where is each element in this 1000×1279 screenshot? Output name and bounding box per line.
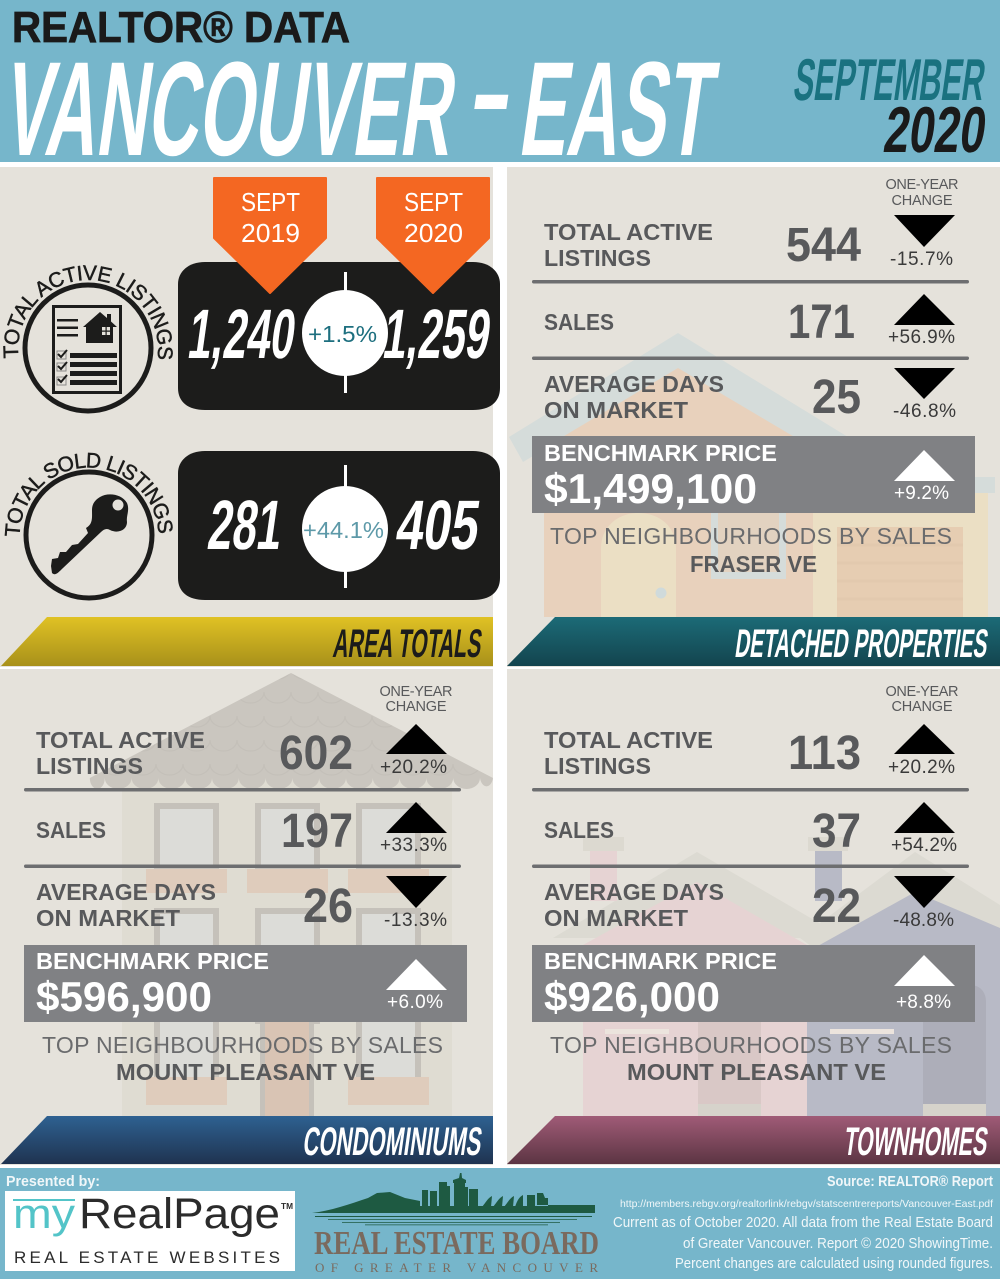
active listings values: 1,259 xyxy=(379,294,496,373)
curved heading: total active listings: TOTAL ACTIVE LISTINGS xyxy=(3,265,173,360)
benchmark price box: $1,499,100 xyxy=(544,465,757,512)
stat: average days on market: -46.8% xyxy=(893,401,956,422)
benchmark price box: BENCHMARK PRICE xyxy=(544,948,777,974)
benchmark price box xyxy=(532,436,975,513)
stat: sales: SALES xyxy=(36,817,106,843)
top neighbourhood: MOUNT PLEASANT VE xyxy=(627,1059,886,1085)
title: - xyxy=(462,25,523,159)
stat: total active listings xyxy=(36,724,447,780)
active listings black box xyxy=(178,262,500,410)
stat: total active listings: +20.2% xyxy=(888,757,955,778)
stat: total active listings: -15.7% xyxy=(890,249,953,270)
logo: real estate board of greater vancouver: REAL ESTATE BOARD xyxy=(314,1225,599,1262)
stat: sales: 197 xyxy=(281,805,353,858)
stat: total active listings xyxy=(544,177,958,272)
stat: average days on market: -48.8% xyxy=(893,910,954,931)
title: VANCOUVER xyxy=(0,34,466,184)
illustration: detached house xyxy=(509,333,995,617)
banner: condominiums xyxy=(1,1116,493,1164)
footer xyxy=(0,1168,1000,1279)
one-year change heading xyxy=(380,684,452,715)
one-year change heading: ONE-YEAR xyxy=(380,684,452,700)
stat: sales: 171 xyxy=(788,296,855,349)
sold listings values xyxy=(204,485,485,564)
panel: area totals xyxy=(0,167,500,667)
stat: total active listings: LISTINGS xyxy=(36,753,143,779)
active listings values xyxy=(184,294,496,373)
header banner xyxy=(0,0,1000,184)
sold change dial xyxy=(302,465,388,588)
stat: total active listings: 602 xyxy=(279,727,353,780)
top neighbourhood: TOP NEIGHBOURHOODS BY SALES xyxy=(550,523,952,549)
benchmark price box xyxy=(24,945,467,1022)
logo: myRealPage: my xyxy=(13,1190,75,1237)
top neighbourhood xyxy=(550,523,952,577)
banner: condominiums: CONDOMINIUMS xyxy=(301,1119,485,1164)
stat: average days on market xyxy=(36,876,447,933)
presented by label: Presented by: xyxy=(6,1173,100,1190)
stat: average days on market: ON MARKET xyxy=(36,905,180,931)
stat: sales xyxy=(544,802,957,858)
ribbon: sept 2020: 2020 xyxy=(404,218,463,248)
stat: total active listings: LISTINGS xyxy=(544,753,651,779)
stat: total active listings: TOTAL ACTIVE xyxy=(36,727,205,753)
top neighbourhood: TOP NEIGHBOURHOODS BY SALES xyxy=(550,1032,952,1058)
stat: average days on market: AVERAGE DAYS xyxy=(544,879,724,905)
stat: total active listings xyxy=(544,724,955,780)
icon: key xyxy=(26,472,152,598)
stat: total active listings: 113 xyxy=(788,727,861,780)
panel: detached properties xyxy=(507,167,1000,667)
stat: average days on market: 22 xyxy=(812,880,861,933)
banner: townhomes xyxy=(507,1116,1000,1164)
benchmark price box: +6.0% xyxy=(387,992,443,1013)
source notes xyxy=(613,1174,993,1272)
stat: sales: SALES xyxy=(544,817,614,843)
illustration: condo building xyxy=(90,673,493,1116)
stat: sales: +33.3% xyxy=(380,835,447,856)
stat: average days on market: AVERAGE DAYS xyxy=(544,371,724,397)
sold listings values: 281 xyxy=(204,485,288,564)
stat: total active listings: ONE-YEAR xyxy=(886,177,958,193)
stat: sales: 37 xyxy=(812,805,861,858)
stat: total active listings: LISTINGS xyxy=(544,245,651,271)
one-year change heading: CHANGE xyxy=(386,699,447,715)
banner: detached properties xyxy=(507,617,1000,666)
top neighbourhood xyxy=(550,1032,952,1085)
illustration: townhouses xyxy=(553,837,1000,1116)
stat: sales: +54.2% xyxy=(891,835,957,856)
stat: average days on market: ON MARKET xyxy=(544,905,688,931)
ribbon: sept 2019 xyxy=(214,178,326,293)
stat: average days on market: 26 xyxy=(303,880,353,933)
panel: townhomes xyxy=(507,669,1000,1165)
ribbon: sept 2019: SEPT xyxy=(241,187,300,217)
top neighbourhood: FRASER VE xyxy=(690,551,817,577)
active change dial: +1.5% xyxy=(308,321,377,347)
top neighbourhood xyxy=(42,1032,443,1085)
sold listings values: 405 xyxy=(392,485,485,564)
stat: total active listings: TOTAL ACTIVE xyxy=(544,727,713,753)
stat: average days on market: 25 xyxy=(812,371,861,424)
logo: real estate board of greater vancouver xyxy=(312,1173,599,1275)
sold listings black box xyxy=(178,451,500,600)
sold change dial: +44.1% xyxy=(303,517,384,543)
stat: sales: SALES xyxy=(544,309,614,335)
stat: average days on market: ON MARKET xyxy=(544,397,688,423)
ribbon: sept 2019: 2019 xyxy=(241,218,300,248)
panel: condominiums xyxy=(0,669,493,1165)
ribbon: sept 2020 xyxy=(377,178,489,293)
benchmark price box: BENCHMARK PRICE xyxy=(36,948,269,974)
benchmark price box: +9.2% xyxy=(894,483,949,504)
one-year change heading: CHANGE xyxy=(892,699,953,715)
header kicker: REALTOR® DATA xyxy=(12,3,350,52)
stat: average days on market: -13.3% xyxy=(384,910,447,931)
active listings values: 1,240 xyxy=(184,294,301,373)
logo: myRealPage: RealPage xyxy=(79,1190,280,1238)
stat: total active listings: +20.2% xyxy=(380,757,447,778)
top neighbourhood: MOUNT PLEASANT VE xyxy=(116,1059,375,1085)
one-year change heading xyxy=(886,684,958,715)
stat: total active listings: 544 xyxy=(786,219,861,272)
logo: myRealPage: REAL ESTATE WEBSITES xyxy=(14,1248,280,1267)
top neighbourhood: TOP NEIGHBOURHOODS BY SALES xyxy=(42,1032,443,1058)
stat: sales xyxy=(544,294,955,349)
ribbon: sept 2020: SEPT xyxy=(404,187,463,217)
benchmark price box: +8.8% xyxy=(896,992,951,1013)
stat: average days on market xyxy=(544,876,955,933)
benchmark price box: BENCHMARK PRICE xyxy=(544,440,777,466)
benchmark price box: $926,000 xyxy=(544,973,720,1020)
stat: average days on market: AVERAGE DAYS xyxy=(36,879,216,905)
active change dial xyxy=(302,272,388,393)
stat: total active listings: TOTAL ACTIVE xyxy=(544,219,713,245)
stat: total active listings: CHANGE xyxy=(892,193,953,209)
logo: myRealPage xyxy=(5,1190,295,1271)
curved heading: total sold listings: TOTAL SOLD LISTINGS xyxy=(4,452,173,536)
stat: average days on market xyxy=(544,368,956,424)
logo: myRealPage: TM xyxy=(281,1202,293,1211)
icon: listing document xyxy=(25,285,151,411)
benchmark price box xyxy=(532,945,975,1022)
banner: area totals: AREA TOTALS xyxy=(331,621,485,666)
logo: real estate board of greater vancouver: OF GREATER VANCOUVER xyxy=(315,1260,598,1275)
one-year change heading: ONE-YEAR xyxy=(886,684,958,700)
title: EAST xyxy=(513,34,725,184)
stat: sales: +56.9% xyxy=(888,327,955,348)
source notes: http://members.rebgv.org/realtorlink/rebgv/statscentrereports/Vancouver-East.pdf xyxy=(620,1198,993,1210)
stat: sales xyxy=(36,802,447,858)
banner: area totals xyxy=(1,617,493,666)
benchmark price box: $596,900 xyxy=(36,973,212,1020)
